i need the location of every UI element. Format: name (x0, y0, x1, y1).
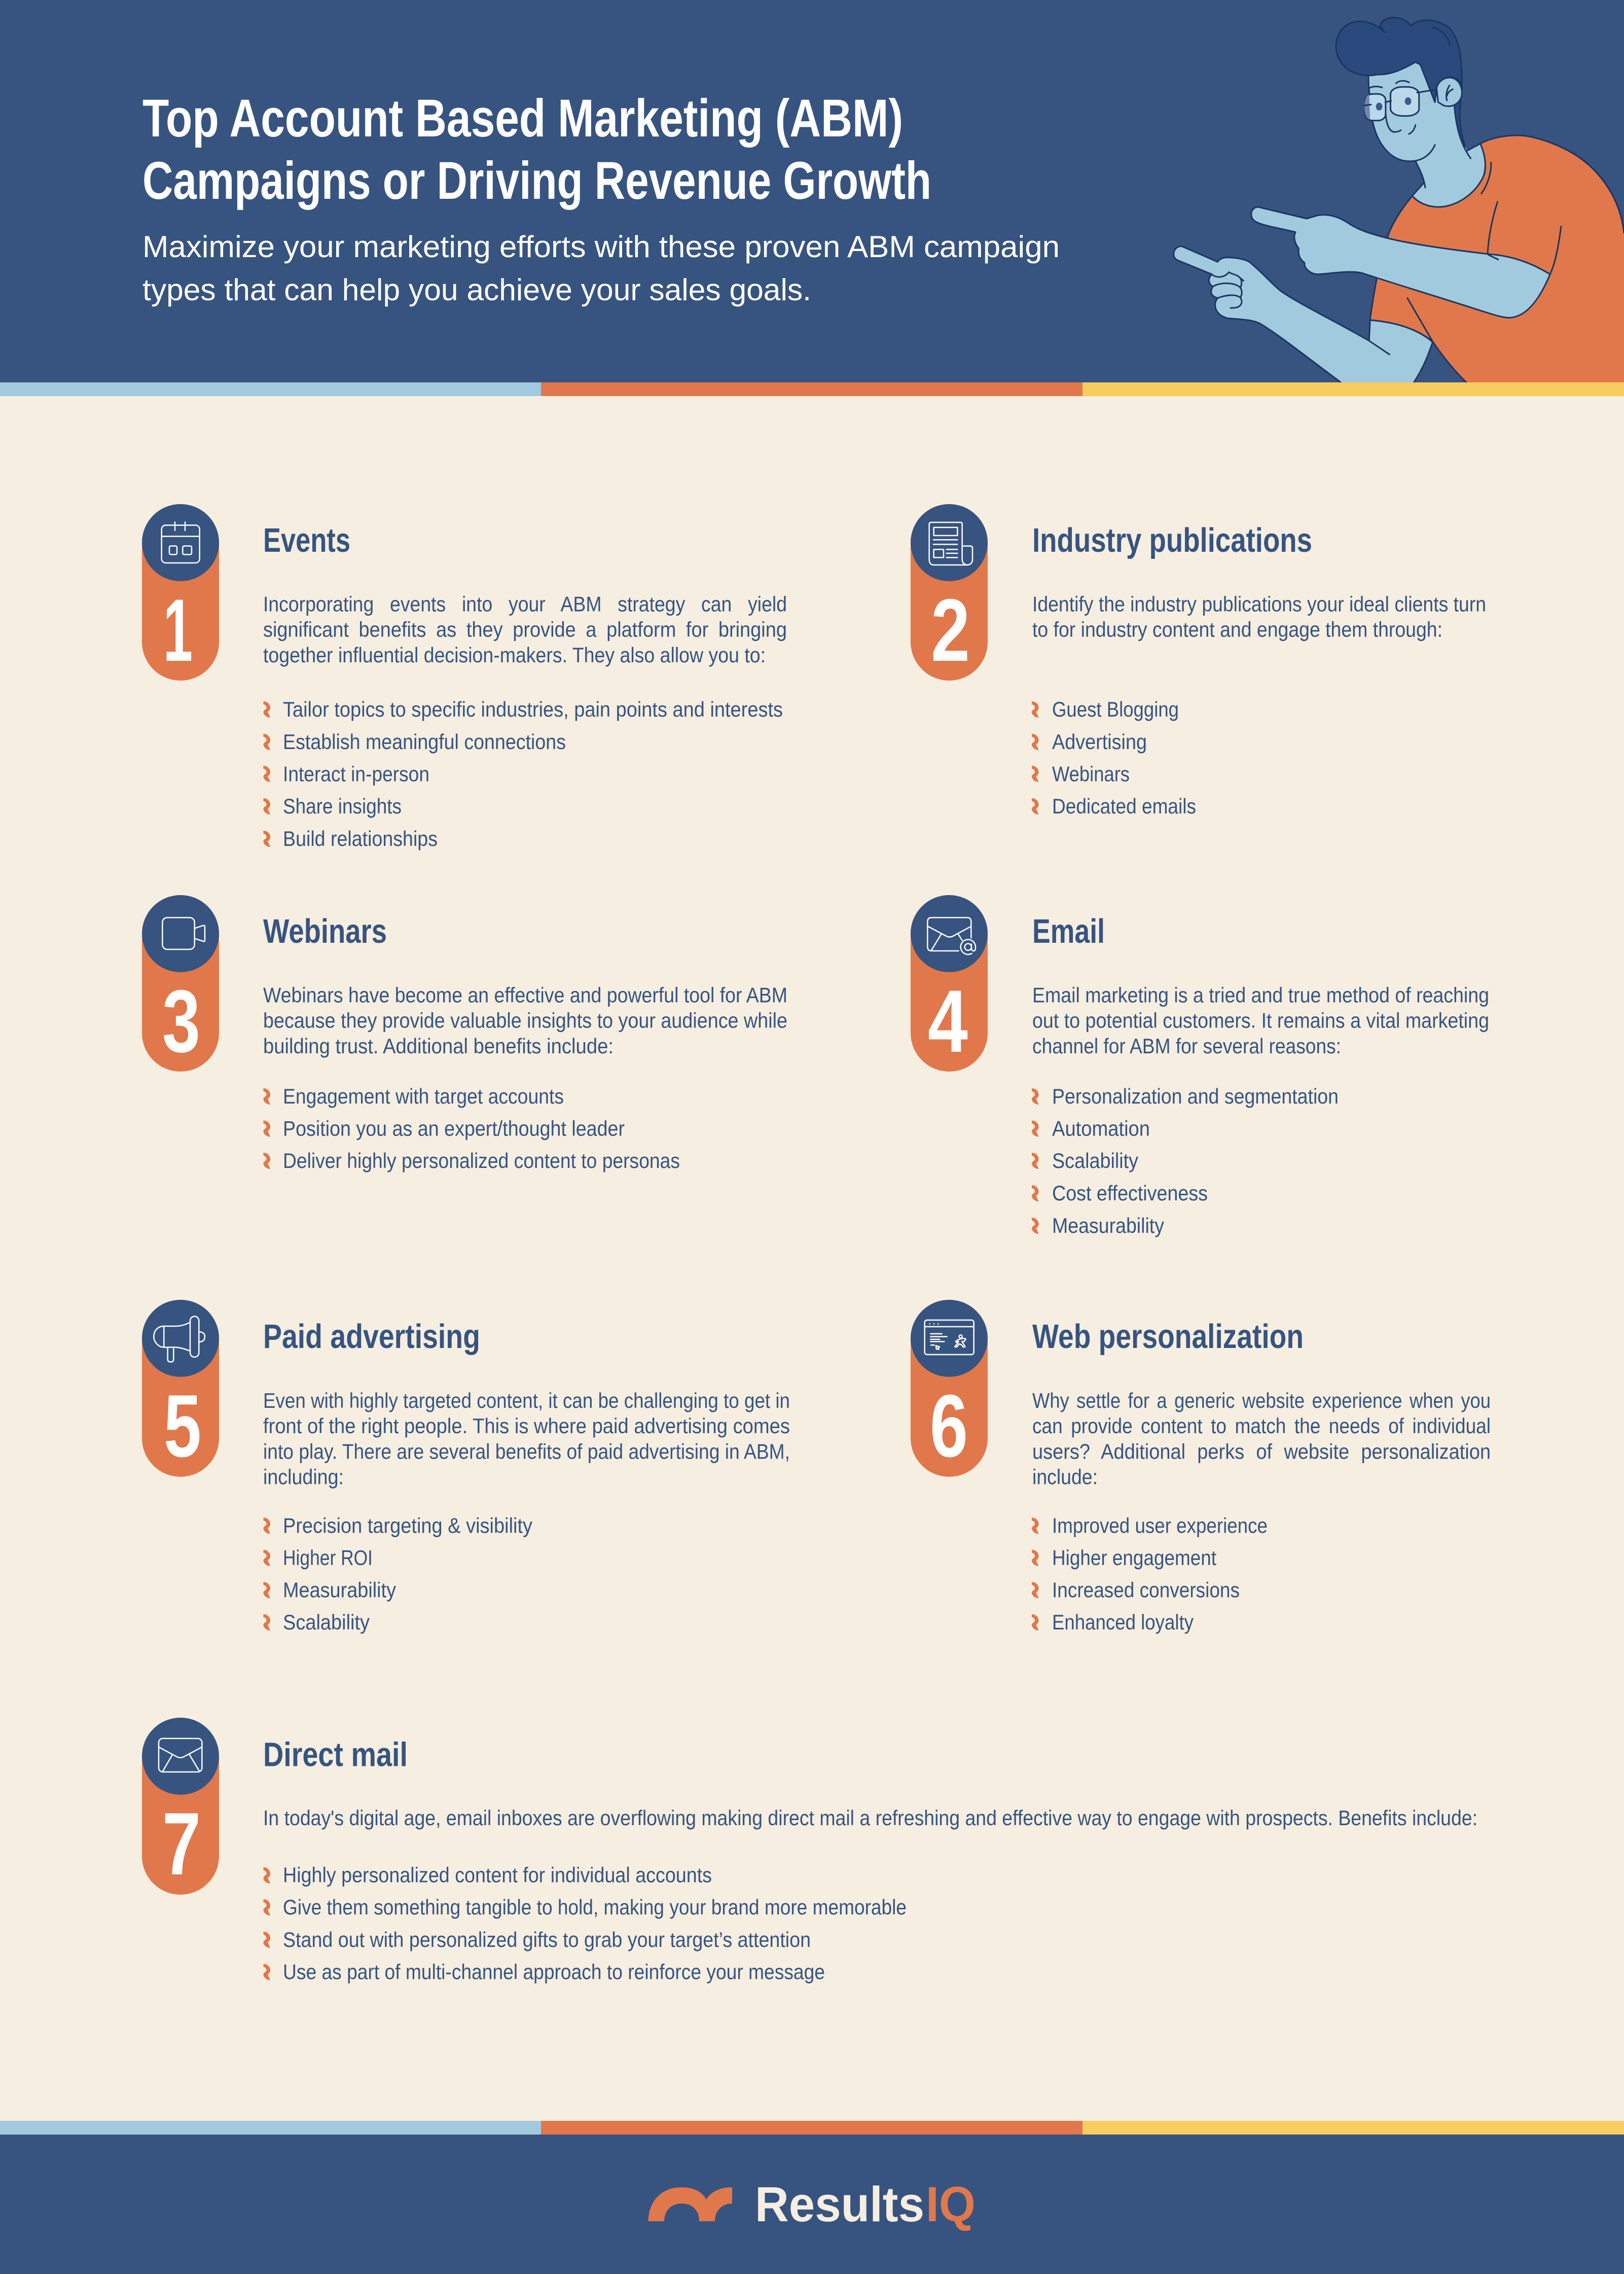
list: Engagement with target accounts (283, 1084, 564, 1108)
description: Even with highly targeted content, it can be challenging to get in (263, 1389, 790, 1412)
icon: newspaper (929, 522, 972, 565)
list: Advertising (1052, 730, 1147, 754)
heading: Paid advertising (263, 1318, 480, 1356)
list: Position you as an expert/thought leader (283, 1117, 625, 1140)
description: include: (1032, 1465, 1098, 1489)
icon: browser window (925, 1320, 974, 1355)
badge 5: 5 (164, 1377, 201, 1476)
badge 6: 6 (930, 1377, 968, 1476)
list: Improved user experience (1052, 1513, 1268, 1538)
section 4: Email (911, 895, 1489, 1237)
section 3: Webinars (142, 895, 787, 1172)
heading: Webinars (263, 912, 387, 950)
header banner (0, 0, 1624, 394)
list (264, 1513, 532, 1634)
list: Higher ROI (283, 1546, 373, 1570)
subtitle: Maximize your marketing efforts with these proven ABM campaign (142, 230, 1060, 264)
list: Give them something tangible to hold, making your brand more memorable (283, 1895, 907, 1919)
badge 5 (142, 1300, 219, 1477)
heading: Email (1032, 912, 1105, 950)
badge 4: 4 (928, 972, 968, 1071)
badge 4 (911, 895, 988, 1072)
description: Identify the industry publications your ideal clients turn (1032, 592, 1486, 616)
badge 2 (911, 504, 988, 681)
description: Email marketing is a tried and true method of reaching (1032, 983, 1489, 1007)
footer (0, 2135, 1624, 2274)
description: Why settle for a generic website experience when you (1032, 1389, 1491, 1412)
list: Cost effectiveness (1052, 1181, 1208, 1205)
list: Interact in-person (283, 762, 429, 786)
icon: email with at sign (927, 917, 976, 954)
illustration: man pointing (1174, 18, 1624, 394)
list: Webinars (1052, 762, 1130, 786)
icon: megaphone (154, 1317, 205, 1362)
description (263, 1389, 790, 1489)
list: Personalization and segmentation (1052, 1084, 1339, 1108)
list: Measurability (283, 1578, 396, 1602)
list: Automation (1052, 1117, 1150, 1140)
badge 3 (142, 895, 219, 1072)
logo: ResultsIQ: Results (755, 2177, 924, 2232)
section 7: Direct mail (142, 1718, 1477, 1984)
list: Scalability (283, 1610, 370, 1634)
list: Precision targeting & visibility (283, 1513, 532, 1538)
description (263, 592, 787, 667)
icon: video camera (162, 917, 205, 949)
list: Guest Blogging (1052, 697, 1179, 721)
description: together influential decision-makers. They also allow you to: (263, 643, 766, 667)
description: including: (263, 1465, 344, 1489)
bottom color stripe (0, 2121, 1624, 2135)
badge 3: 3 (162, 972, 200, 1071)
description: significant benefits as they provide a platform for bringing (263, 618, 787, 642)
list (264, 697, 783, 850)
list (264, 1084, 680, 1172)
badge 7 (142, 1718, 219, 1895)
list (1032, 1084, 1339, 1237)
section 5: Paid advertising (142, 1300, 790, 1634)
list: Tailor topics to specific industries, pain points and interests (283, 697, 783, 721)
description (1032, 592, 1486, 642)
description: front of the right people. This is where paid advertising comes (263, 1414, 790, 1438)
description: into play. There are several benefits of paid advertising in ABM, (263, 1439, 790, 1464)
badge 1 (142, 504, 219, 681)
heading: Direct mail (263, 1735, 408, 1774)
list: Stand out with personalized gifts to grab your target’s attention (283, 1928, 811, 1951)
list: Measurability (1052, 1214, 1164, 1237)
top color stripe (0, 382, 1624, 396)
subtitle: types that can help you achieve your sales goals. (142, 273, 811, 307)
list: Use as part of multi-channel approach to reinforce your message (283, 1960, 825, 1984)
description: out to potential customers. It remains a vital marketing (1032, 1009, 1489, 1033)
badge 7: 7 (162, 1795, 201, 1894)
description: In today's digital age, email inboxes are overflowing making direct mail a refreshing and effective way to engage with prospects. Benefits include: (263, 1806, 1477, 1830)
logo: ResultsIQ (648, 2177, 976, 2232)
description: channel for ABM for several reasons: (1032, 1034, 1341, 1058)
list: Increased conversions (1052, 1578, 1240, 1602)
icon: envelope (159, 1738, 202, 1772)
heading: Industry publications (1032, 521, 1312, 559)
description: Webinars have become an effective and powerful tool for ABM (263, 983, 787, 1007)
title: Campaigns or Driving Revenue Growth (142, 151, 931, 210)
subtitle (142, 230, 1060, 307)
description: users? Additional perks of website personalization (1032, 1439, 1491, 1464)
description: building trust. Additional benefits include: (263, 1034, 613, 1058)
list (1032, 1513, 1268, 1634)
list: Share insights (283, 794, 402, 818)
section 2: Industry publications (911, 504, 1486, 818)
description: to for industry content and engage them through: (1032, 618, 1442, 642)
list: Enhanced loyalty (1052, 1610, 1194, 1634)
description (263, 983, 787, 1058)
list: Scalability (1052, 1149, 1138, 1172)
description: Incorporating events into your ABM strategy can yield (263, 592, 787, 616)
heading: Web personalization (1032, 1318, 1304, 1356)
description (1032, 1389, 1491, 1489)
heading: Events (263, 521, 350, 559)
icon: calendar (162, 522, 200, 563)
list: Dedicated emails (1052, 794, 1196, 818)
title (142, 89, 931, 210)
description (1032, 983, 1489, 1058)
description: can provide content to match the needs of individual (1032, 1414, 1491, 1438)
list: Higher engagement (1052, 1546, 1216, 1570)
badge 6 (911, 1300, 988, 1477)
list (1032, 697, 1196, 818)
list: Highly personalized content for individual accounts (283, 1863, 712, 1887)
title: Top Account Based Marketing (ABM) (142, 89, 903, 148)
logo: ResultsIQ: IQ (926, 2177, 976, 2232)
section 1: Events (142, 504, 787, 850)
list: Establish meaningful connections (283, 730, 566, 754)
list: Deliver highly personalized content to personas (283, 1149, 680, 1172)
badge 1: 1 (163, 581, 193, 680)
list (264, 1863, 907, 1984)
section 6: Web personalization (911, 1300, 1491, 1634)
badge 2: 2 (931, 581, 970, 680)
description: because they provide valuable insights to your audience while (263, 1009, 787, 1033)
list: Build relationships (283, 827, 438, 850)
